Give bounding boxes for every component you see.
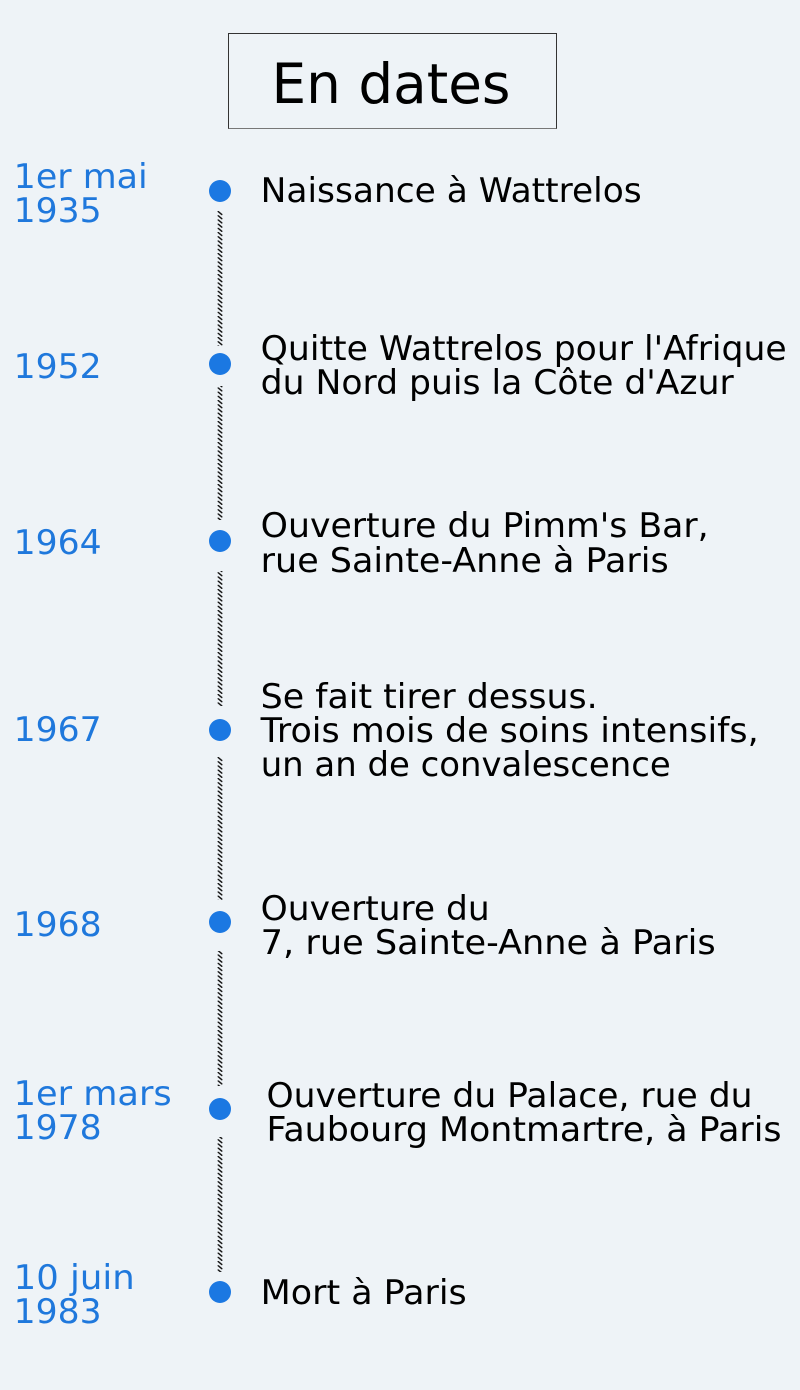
event: 1952: Quitte Wattrelos pour l'Afrique [261,329,787,369]
event: 1er mai 1935 [14,157,642,231]
event: 1967: 1967 [14,710,102,750]
title [228,34,556,129]
event: 1968: Ouverture du [261,889,490,929]
event: 1964: Ouverture du Pimm's Bar, [261,506,709,546]
event: 1967: Trois mois de soins intensifs, [260,711,759,751]
event: 1er mai 1935: Naissance à Wattrelos [261,171,642,211]
event: 1964: 1964 [14,523,102,563]
connector lines [218,211,222,1272]
event: 1967 [14,677,759,785]
event: 1er mars 1978: 1978 [14,1108,102,1148]
event: 1952: 1952 [14,347,102,387]
event: 1968: 7, rue Sainte-Anne à Paris [261,923,716,963]
event: 1er mai 1935: 1935 [14,191,102,231]
event: 1er mars 1978: 1er mars [14,1074,172,1114]
event: 10 juin 1983: 1983 [14,1292,102,1332]
event: 1er mars 1978 [14,1074,781,1150]
event: 1er mars 1978: Ouverture du Palace, rue du [266,1076,752,1116]
event: 1967: un an de convalescence [261,745,671,785]
event: 1952: du Nord puis la Côte d'Azur [261,363,735,403]
event: 1er mars 1978: Faubourg Montmartre, à Paris [266,1110,782,1150]
event: 1968: 1968 [14,905,102,945]
event: 10 juin 1983: 10 juin [14,1258,135,1298]
event: 1952 [14,329,787,403]
event: 1968 [14,889,716,963]
event: 1967: Se fait tirer dessus. [261,677,598,717]
event: 1964 [14,506,709,581]
event: 10 juin 1983 [14,1258,467,1332]
event: 1er mai 1935: 1er mai [14,157,148,197]
title: En dates [272,52,510,116]
event: 1964: rue Sainte-Anne à Paris [261,541,669,581]
event: 10 juin 1983: Mort à Paris [261,1273,467,1313]
